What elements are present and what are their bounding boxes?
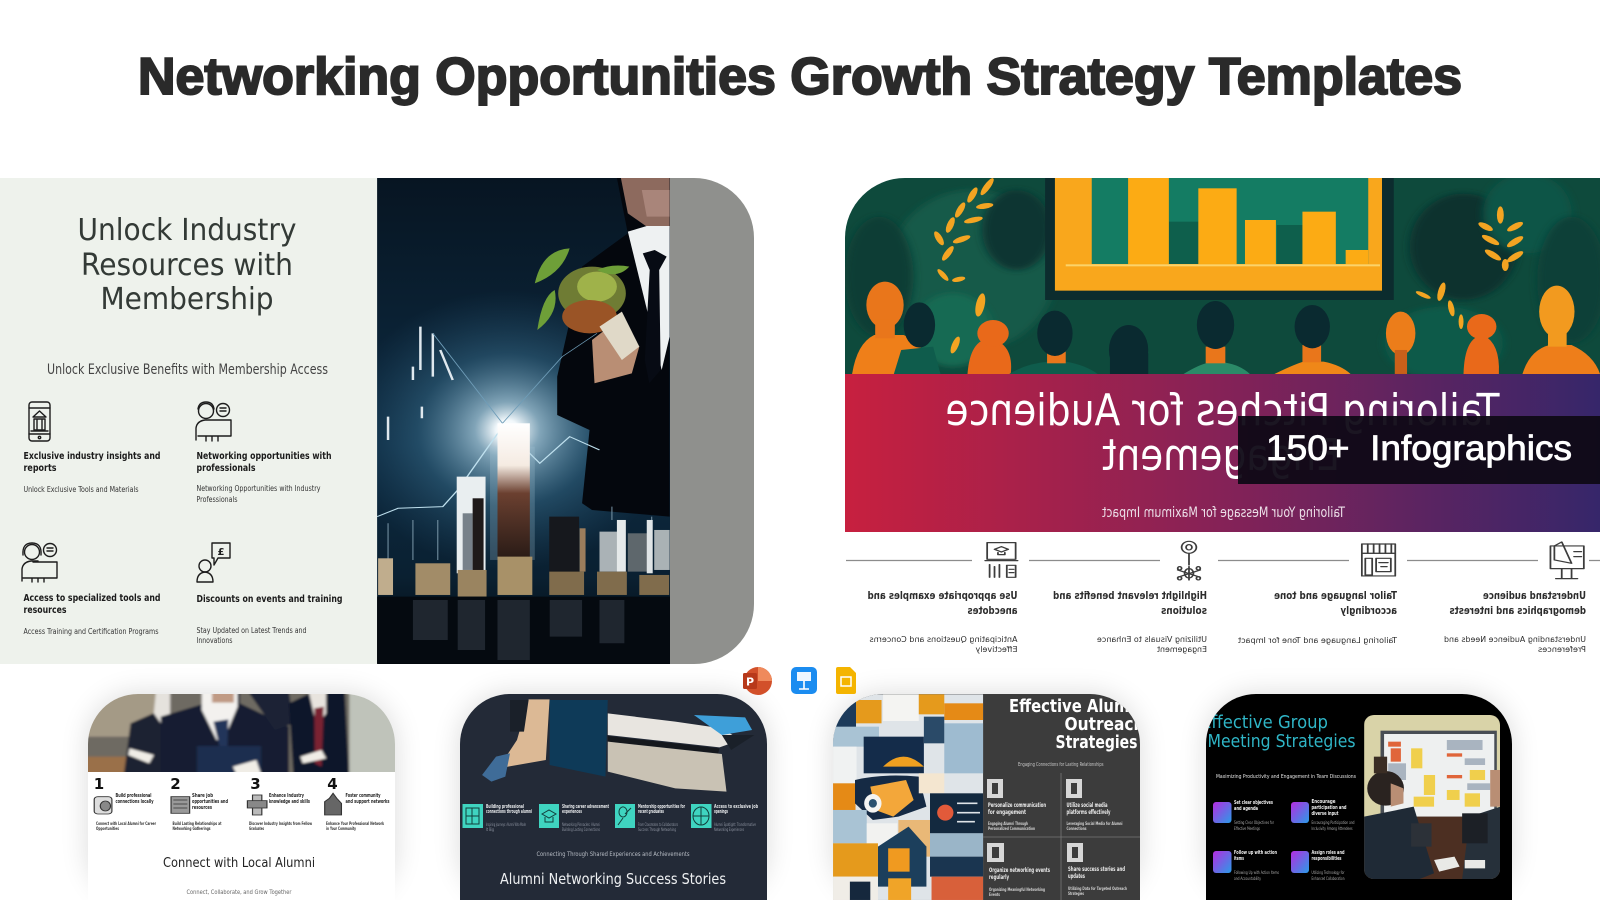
item descriptions (988, 821, 1127, 898)
audience (852, 335, 921, 374)
step text: Enhance Industry (269, 793, 304, 799)
step: highlight benefits: Utilizing Visuals to Enhance (1097, 635, 1207, 644)
illustration: digital collage (833, 694, 983, 900)
card: connect with local alumni (79, 690, 401, 900)
item text: responsibilities (1312, 856, 1342, 862)
benefit: discounts: Stay Updated on Latest Trends and (196, 626, 306, 635)
step text: Foster community (346, 793, 381, 799)
step: highlight benefits (1053, 590, 1207, 654)
item descriptions: Effective Meetings (1234, 826, 1260, 831)
step: use examples: Use appropriate examples and (868, 590, 1018, 602)
item text: experiences (562, 809, 582, 815)
item descriptions: Strategies (1068, 891, 1084, 897)
step: tailor language: accordingly (1340, 605, 1397, 617)
step numbers: 3 (250, 775, 261, 793)
slide heading: Unlock Industry (78, 213, 296, 248)
step numbers (95, 778, 337, 789)
step text (116, 793, 390, 809)
step: use examples: Effectively (975, 645, 1018, 654)
step numbers: 1 (94, 775, 104, 793)
callout: 150+ infographics (1238, 416, 1600, 484)
item descriptions: It Big (486, 827, 494, 832)
step text: resources (192, 805, 212, 811)
mirrored step row (846, 541, 1600, 654)
benefit: insights: Unlock Exclusive Tools and Materials (24, 485, 138, 494)
benefit: networking: professionals (196, 463, 256, 474)
step descriptions: in Your Community (326, 826, 356, 832)
item text: diverse input (1312, 811, 1339, 817)
step: highlight benefits: Highlight relevant benefits and (1053, 590, 1207, 602)
item descriptions: Setting Clear Objectives for (1234, 820, 1274, 825)
illustration: presentation with audience (845, 173, 1600, 380)
item descriptions: From Classmates to Collaborators (638, 822, 678, 827)
slide heading: Membership (100, 282, 274, 317)
step: use examples: anecdotes (968, 605, 1018, 617)
card shadows (88, 694, 1512, 900)
item descriptions (486, 822, 756, 832)
slide subtitle: Unlock Exclusive Benefits with Membership Access (47, 362, 328, 378)
step: tailor language: Tailoring Language and Tone for Impact (1238, 636, 1398, 645)
step descriptions: Discover Industry Insights from Fellow (249, 821, 312, 827)
step descriptions: Build Lasting Relationships at (172, 821, 222, 827)
benefit: tools: resources (24, 605, 67, 616)
item descriptions: Alumni Spotlight: Transformative (714, 822, 756, 827)
item descriptions: Networking Experiences (714, 827, 744, 832)
step text: Build professional (116, 793, 152, 799)
step: understand audience: Understanding Audience Needs and (1444, 635, 1586, 644)
item icons (987, 779, 1083, 862)
panel: audience pitch slide preview (845, 173, 1600, 532)
step text: and support networks (346, 799, 390, 805)
icon: Keynote (791, 667, 817, 694)
icon: Google Slides (836, 667, 856, 694)
step numbers: 2 (170, 775, 181, 793)
item descriptions: Building Lasting Connections (562, 827, 600, 832)
benefit: insights: Exclusive industry insights and (24, 451, 160, 462)
step text: Share job (192, 793, 213, 799)
benefit: discounts (196, 543, 342, 645)
step: highlight benefits: Engagement (1157, 645, 1207, 654)
card heading: Effective Group (1201, 712, 1328, 733)
icon: person with pound bubble (197, 543, 230, 582)
panel: membership slide preview (0, 178, 754, 665)
photo: graduates in blazers (88, 694, 395, 772)
item text: Personalize communication (988, 802, 1046, 809)
slide heading: Resources with (81, 248, 293, 283)
mirrored slide heading (946, 385, 1500, 481)
step descriptions: Opportunities (96, 826, 119, 832)
card heading (1201, 712, 1356, 752)
benefit: networking: Professionals (196, 495, 238, 504)
card heading: Alumni Networking Success Stories (500, 870, 726, 888)
benefit: insights (24, 402, 160, 494)
icon: person with pound bubble: £ (218, 547, 225, 558)
benefit: tools: Access to specialized tools and (24, 593, 160, 604)
item descriptions: Networking Pinnacles: Alumni (562, 822, 600, 827)
step: use examples (868, 590, 1018, 654)
item descriptions: Success Through Networking (638, 827, 676, 832)
step: tailor language: Tailor language and tone (1274, 590, 1397, 602)
item text: platforms effectively (1066, 809, 1111, 816)
item text: Organize networking events (989, 867, 1050, 874)
benefit: networking: Networking Opportunities with Industry (196, 484, 321, 493)
benefit: insights: reports (24, 463, 57, 474)
benefit: tools (22, 543, 160, 636)
item text (486, 804, 758, 815)
card heading: Connect with Local Alumni (163, 856, 315, 871)
benefit: discounts: Innovations (196, 636, 232, 645)
item descriptions: Encouraging Participation and (1312, 820, 1355, 825)
card subtitle: Connecting Through Shared Experiences and Achievements (536, 850, 690, 858)
item descriptions: Events (989, 892, 1000, 898)
icon: woman at laptop (22, 543, 57, 582)
card subtitle: Engaging Connections for Lasting Relationships (1018, 762, 1104, 768)
title: Networking Opportunities Growth Strategy Templates (138, 48, 1462, 106)
benefit: networking (196, 402, 332, 504)
item text: Set clear objectives (1234, 800, 1273, 806)
card: alumni outreach strategies (833, 694, 1145, 900)
card heading: Outreach (1064, 714, 1144, 735)
tile glyphs (466, 807, 709, 825)
item descriptions: Leveraging Social Media for Alumni (1066, 821, 1123, 827)
item text: Assign roles and (1312, 850, 1345, 856)
icon: PowerPoint: P (746, 676, 754, 688)
item descriptions: Connections (1066, 826, 1087, 832)
teal icon tiles (462, 804, 712, 828)
app icons (743, 667, 856, 695)
icon: phone with bank (29, 402, 50, 441)
item descriptions: Utilizing Data for Targeted Outreach (1068, 886, 1127, 892)
item text: recent graduates (638, 809, 664, 815)
photo: team at whiteboard (1364, 715, 1500, 879)
mirrored slide heading: Tailoring Pitches for Audience (946, 385, 1500, 436)
item descriptions: Utilizing Technology for (1312, 870, 1345, 875)
benefit: networking: Networking opportunities with (196, 451, 332, 462)
card heading: Meeting Strategies (1208, 731, 1356, 752)
mirrored slide subtitle: Tailoring Your Message for Maximum Impact (1102, 505, 1346, 521)
leaves (932, 177, 1526, 354)
item descriptions: Engaging Alumni Through (988, 821, 1028, 827)
item descriptions: Inspiring Journeys: Alumni Who Made (486, 822, 526, 827)
step descriptions (96, 822, 384, 831)
item descriptions: Inclusivity Among Attendees (1312, 826, 1352, 831)
step: understand audience: Understand audience (1483, 590, 1586, 602)
item descriptions: and Accountability (1234, 876, 1261, 881)
item text: updates (1068, 873, 1085, 880)
item text (1234, 799, 1347, 862)
item descriptions: Organizing Meaningful Networking (989, 887, 1045, 893)
step descriptions: Connect with Local Alumni for Career (96, 821, 157, 827)
step: understand audience: Preferences (1538, 645, 1586, 654)
step: understand audience (1444, 590, 1586, 654)
item text: Access to exclusive job (714, 804, 758, 810)
item text: Building professional (486, 804, 524, 810)
step text: knowledge and skills (269, 799, 310, 805)
item text: Sharing career advancement (562, 804, 609, 810)
step text: connections locally (116, 799, 154, 805)
item text (988, 802, 1125, 881)
card heading: Effective Alumni (1009, 696, 1145, 717)
mirrored slide heading: Engagement (1102, 430, 1340, 481)
step: tailor language (1238, 590, 1398, 645)
item text: connections through alumni (486, 809, 532, 815)
item text: Mentorship opportunities for (638, 804, 685, 810)
photo: torn image strip (482, 699, 754, 792)
item text: items (1234, 856, 1244, 862)
step numbers: 4 (327, 775, 338, 793)
benefit: discounts: Discounts on events and training (196, 594, 342, 605)
step: use examples: Anticipating Questions and Concerns (870, 635, 1018, 644)
card heading (1010, 698, 1138, 752)
card subtitle: Connect, Collaborate, and Grow Together (186, 890, 292, 896)
card: alumni success stories (460, 694, 767, 900)
item glyphs (992, 783, 1078, 858)
item descriptions: Personalized Communication (988, 826, 1035, 832)
card subtitle: Maximizing Productivity and Engagement in Team Discussions (1216, 774, 1356, 780)
step descriptions: Enhance Your Professional Network (326, 821, 384, 827)
gradient item icons (1213, 802, 1309, 873)
item text: Utilize social media (1066, 802, 1108, 809)
slide heading (78, 213, 296, 317)
callout: 150+ infographics: 150+ Infographics (1266, 429, 1572, 468)
item text: Encourage (1312, 799, 1336, 805)
step descriptions: Networking Gatherings (172, 826, 211, 832)
step: highlight benefits: solutions (1161, 605, 1207, 617)
item text: openings (714, 809, 728, 815)
item text: and agenda (1234, 806, 1258, 812)
card heading: Strategies (1056, 732, 1138, 753)
step: understand audience: demographics and interests (1450, 605, 1586, 617)
item text: Share success stories and (1068, 866, 1125, 873)
card: group meeting strategies (1201, 694, 1512, 900)
step text: opportunities and (192, 799, 228, 805)
item descriptions: Following Up with Action Items (1234, 870, 1279, 875)
icons: mirrored step icons (985, 541, 1584, 580)
item text: Follow up with action (1234, 850, 1277, 856)
photo: businessman above coin city (377, 178, 670, 664)
item text: regularly (989, 874, 1009, 881)
step icons (94, 793, 341, 815)
step descriptions: Graduates (249, 826, 264, 832)
item descriptions (1234, 820, 1355, 881)
icon: person at laptop (196, 402, 231, 441)
benefit: tools: Access Training and Certification Programs (24, 627, 158, 636)
item text: for engagement (988, 809, 1026, 816)
item descriptions: Enhanced Collaboration (1312, 876, 1345, 881)
item text: participation and (1312, 805, 1347, 811)
